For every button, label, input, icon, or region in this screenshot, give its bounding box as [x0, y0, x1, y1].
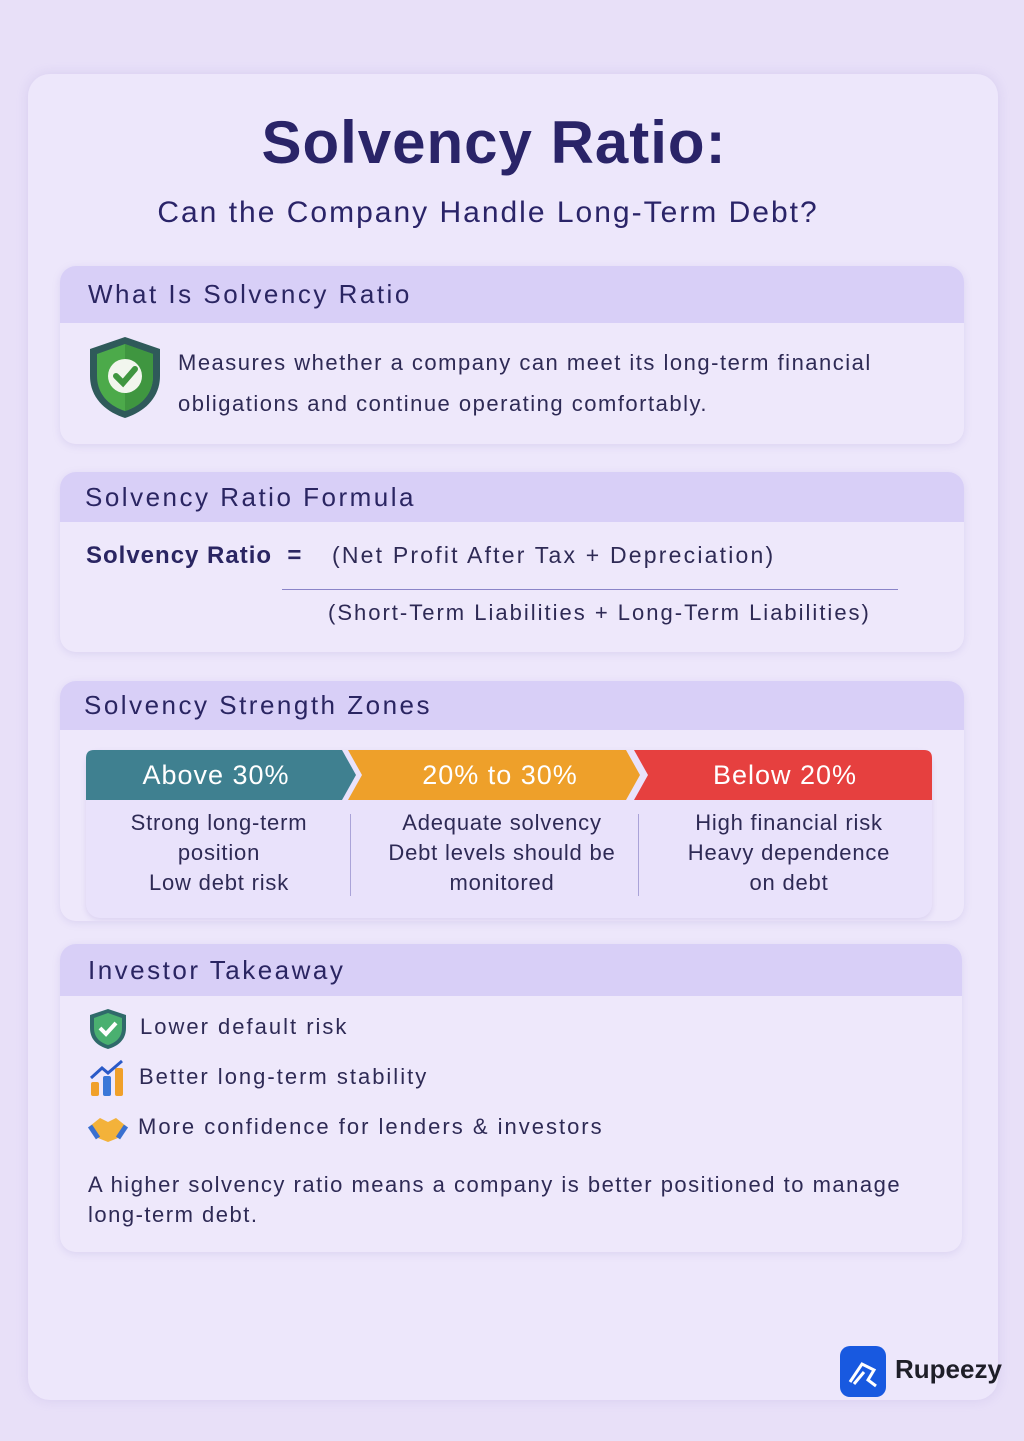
panel: takeaway: [60, 944, 962, 1252]
summary text: A higher solvency ratio means a company is better positioned to manage long-term debt.: [88, 1172, 901, 1227]
zone texts: [131, 810, 307, 895]
zones box: Debt levels should be: [388, 840, 616, 865]
formula: Solvency Ratio =: [86, 542, 302, 569]
zone texts: Strong long-term: [131, 810, 307, 835]
heading: [60, 472, 964, 522]
heading: [60, 266, 964, 323]
heading: Solvency Strength Zones: [84, 690, 432, 720]
icon: shield: [90, 337, 160, 418]
zones box: [86, 750, 932, 918]
formula: (Short-Term Liabilities + Long-Term Liabilities): [328, 600, 871, 625]
zones box: Adequate solvency: [402, 810, 602, 835]
title: Solvency Ratio:: [261, 109, 727, 176]
item 2: [90, 1060, 428, 1096]
item 1: Lower default risk: [140, 1014, 348, 1039]
item 2: Better long-term stability: [139, 1064, 428, 1089]
zones box: High financial risk: [695, 810, 883, 835]
zone headers: [86, 750, 932, 800]
zone headers: Above 30%: [142, 760, 290, 790]
subtitle: Can the Company Handle Long-Term Debt?: [157, 196, 819, 229]
text: Measures whether a company can meet its long-term financial obligations and continue operating comfortably.: [178, 350, 872, 416]
formula: (Net Profit After Tax + Depreciation): [332, 542, 775, 568]
panel: zones: [60, 681, 964, 921]
zone headers: 20% to 30%: [422, 760, 578, 790]
heading: Solvency Ratio Formula: [85, 482, 416, 512]
heading: [60, 681, 964, 730]
zone texts: Low debt risk: [149, 870, 289, 895]
zones box: monitored: [449, 870, 555, 895]
item 3: More confidence for lenders & investors: [138, 1114, 604, 1139]
formula: [86, 542, 898, 625]
zone headers: Below 20%: [713, 760, 857, 790]
zones box: Heavy dependence: [688, 840, 890, 865]
zone texts: position: [178, 840, 260, 865]
logo: Rupeezy: [840, 1346, 1002, 1397]
panel: formula: [60, 472, 964, 652]
item 1: [90, 1009, 348, 1049]
zones box: on debt: [749, 870, 828, 895]
heading: Investor Takeaway: [88, 955, 345, 985]
heading: What Is Solvency Ratio: [88, 279, 412, 309]
heading: [60, 944, 962, 996]
logo: Rupeezy: Rupeezy: [895, 1354, 1002, 1384]
panel: what is: [60, 266, 964, 444]
